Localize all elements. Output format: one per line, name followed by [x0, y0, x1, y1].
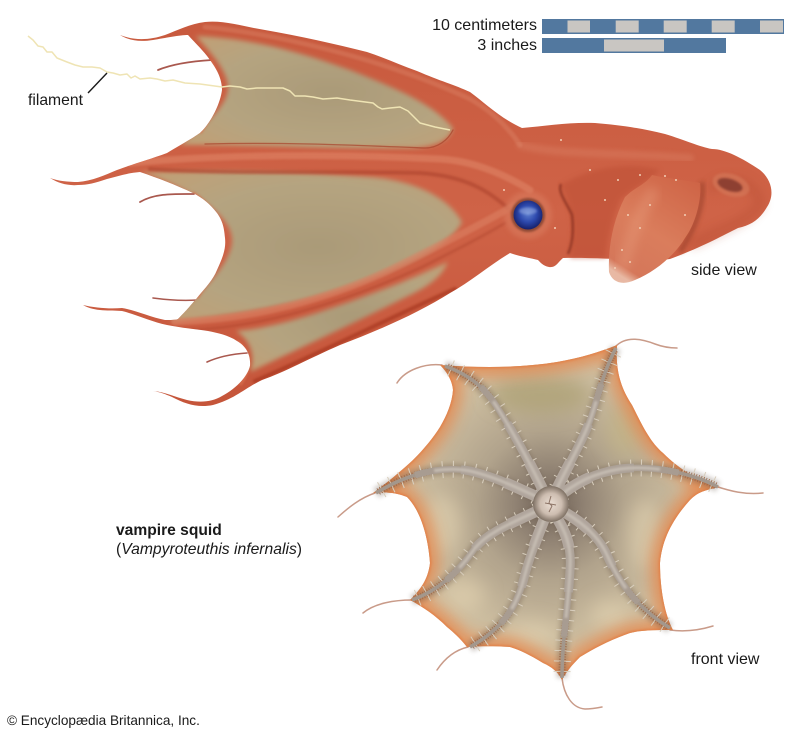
side view label: side view — [691, 262, 757, 279]
scale bars — [432, 17, 784, 54]
filament label: filament — [28, 92, 84, 109]
10 centimeters scale: 10 centimeters — [432, 17, 537, 34]
mantle collar fold — [560, 184, 573, 254]
species title — [116, 522, 302, 558]
species title: (Vampyroteuthis infernalis) — [116, 541, 302, 558]
mantle shading behind fin — [561, 166, 660, 258]
fin — [609, 175, 702, 283]
species title: vampire squid — [116, 522, 222, 539]
front view of vampire squid — [338, 339, 763, 709]
eye — [511, 198, 545, 232]
eight arms with cirri — [376, 348, 718, 678]
pale and olive web patches — [418, 377, 663, 649]
10 centimeters scale — [432, 17, 784, 34]
web edge tint — [193, 60, 248, 385]
web filaments, front view — [338, 339, 763, 709]
web membranes — [140, 36, 462, 372]
side view of vampire squid — [28, 22, 771, 406]
body and arms silhouette — [50, 22, 771, 406]
eye socket ring — [504, 191, 552, 239]
arm ridges and shading — [130, 27, 690, 381]
head end shading and spiracle — [690, 169, 760, 245]
skin photophore dots — [503, 139, 686, 269]
mouth — [533, 486, 569, 522]
filament — [28, 36, 450, 130]
orange web rim — [373, 345, 720, 680]
filament label — [28, 73, 107, 109]
3 inches scale — [477, 37, 726, 54]
short web filaments, side view — [140, 60, 247, 362]
front view label: front view — [691, 651, 760, 668]
copyright: © Encyclopædia Britannica, Inc. — [7, 713, 200, 728]
3 inches scale: 3 inches — [477, 37, 537, 54]
web membrane — [373, 345, 720, 680]
